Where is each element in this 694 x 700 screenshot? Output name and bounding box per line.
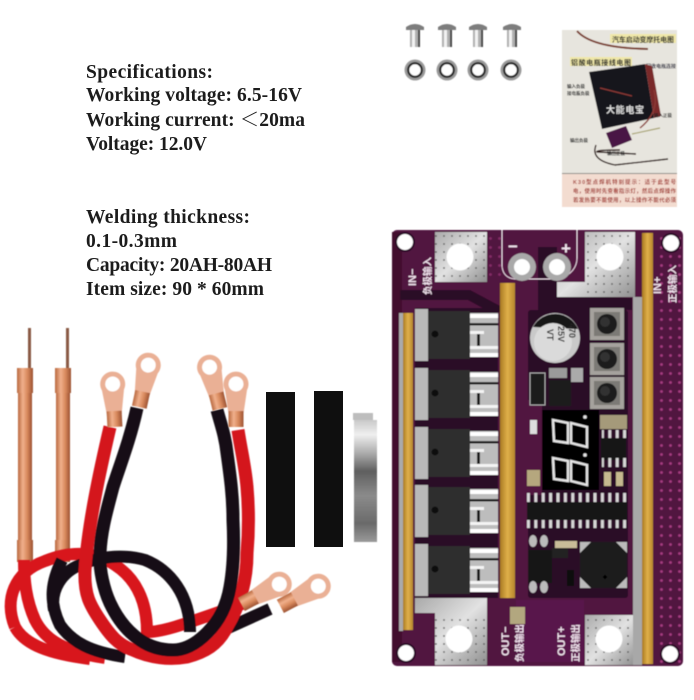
instruction sheet: 大能电宝 <box>606 104 644 115</box>
control circuit area <box>528 310 628 598</box>
display driver chips <box>600 415 627 486</box>
silkscreen input negative: IN− <box>407 269 419 286</box>
mounting holes <box>396 233 680 663</box>
pcb <box>392 230 683 666</box>
heat shrink tube right <box>314 391 343 547</box>
black cable from right pen <box>53 557 270 657</box>
instruction sheet: 若发热要不能使用，以上操作不能代必须 <box>573 196 677 204</box>
instruction sheet: 接电瓶负极 <box>567 90 590 97</box>
pen right <box>55 328 71 562</box>
instruction sheet: 输入负极 <box>567 83 585 90</box>
silkscreen output negative: 负极输出 <box>514 624 526 662</box>
electrolytic capacitor: 470 <box>567 323 577 338</box>
silkscreen output positive <box>556 624 582 662</box>
instruction sheet: 铝酸电瓶接线电图 <box>571 58 631 67</box>
silkscreen input negative: 负极输入 <box>422 256 434 295</box>
seven segment display <box>542 410 599 490</box>
welding and size text block: Item size: 90 * 60mm <box>86 279 264 300</box>
instruction sheet <box>562 30 677 207</box>
heat shrink tube left <box>266 392 295 547</box>
electrolytic capacitor: VT <box>545 329 555 341</box>
mounting screws and washers <box>404 24 522 80</box>
control board <box>392 230 683 666</box>
black main cable <box>100 408 234 650</box>
input terminals <box>502 230 577 281</box>
welding and size text block: Welding thickness: <box>86 207 250 228</box>
specifications text block: Specifications: <box>86 62 213 83</box>
welding and size text block <box>86 207 272 300</box>
specifications text block: Voltage: 12.0V <box>86 134 207 155</box>
specifications text block: Working current: ＜20ma <box>86 110 305 131</box>
specifications text block <box>86 62 305 155</box>
instruction sheet: K30型点焊机特别提示：适于此型号 <box>573 178 677 186</box>
mosfet row <box>415 308 498 598</box>
cable bundle <box>11 408 270 659</box>
electrolytic capacitor: 25V <box>556 326 566 342</box>
instruction sheet: 输出正极 <box>607 150 625 157</box>
silkscreen output positive: 正极输出 <box>570 624 582 662</box>
silkscreen output negative: OUT− <box>500 626 512 656</box>
welding and size text block: Capacity: 20AH-80AH <box>86 255 272 276</box>
main ic <box>527 493 627 528</box>
red cable from left pen <box>11 554 245 659</box>
silkscreen input positive <box>652 264 679 303</box>
instruction sheet: 回收电瓶连接 <box>646 63 676 70</box>
silkscreen input positive: IN+ <box>652 277 664 294</box>
input terminals: + <box>561 239 571 258</box>
buzzer <box>580 542 627 588</box>
silver terminal pads <box>415 232 642 665</box>
spot welding pens <box>17 328 71 562</box>
instruction sheet: 输出负极 <box>570 137 588 144</box>
ring terminals <box>100 350 335 617</box>
silkscreen output negative <box>500 624 526 662</box>
small smd parts <box>510 541 577 624</box>
electrolytic capacitor <box>530 313 580 363</box>
silkscreen input negative <box>407 256 434 295</box>
pen left <box>17 328 33 562</box>
welding and size text block: 0.1-0.3mm <box>86 231 177 252</box>
silkscreen input positive: 正极输入 <box>667 264 679 303</box>
optocoupler <box>528 535 552 593</box>
instruction sheet: 输入正极 <box>654 112 672 119</box>
input terminals: − <box>508 237 518 256</box>
specifications text block: Working voltage: 6.5-16V <box>86 85 302 106</box>
nickel strip roll <box>353 413 377 542</box>
gold bus bars <box>399 233 653 664</box>
silkscreen output positive: OUT+ <box>556 626 568 656</box>
instruction sheet: 电，使用时先查看指示灯，然后点焊操作 <box>573 187 677 195</box>
instruction sheet: 汽车启动变摩托电图 <box>612 35 674 44</box>
push buttons <box>590 308 624 409</box>
red main cable <box>85 427 248 658</box>
small diode and regulator <box>527 368 583 486</box>
